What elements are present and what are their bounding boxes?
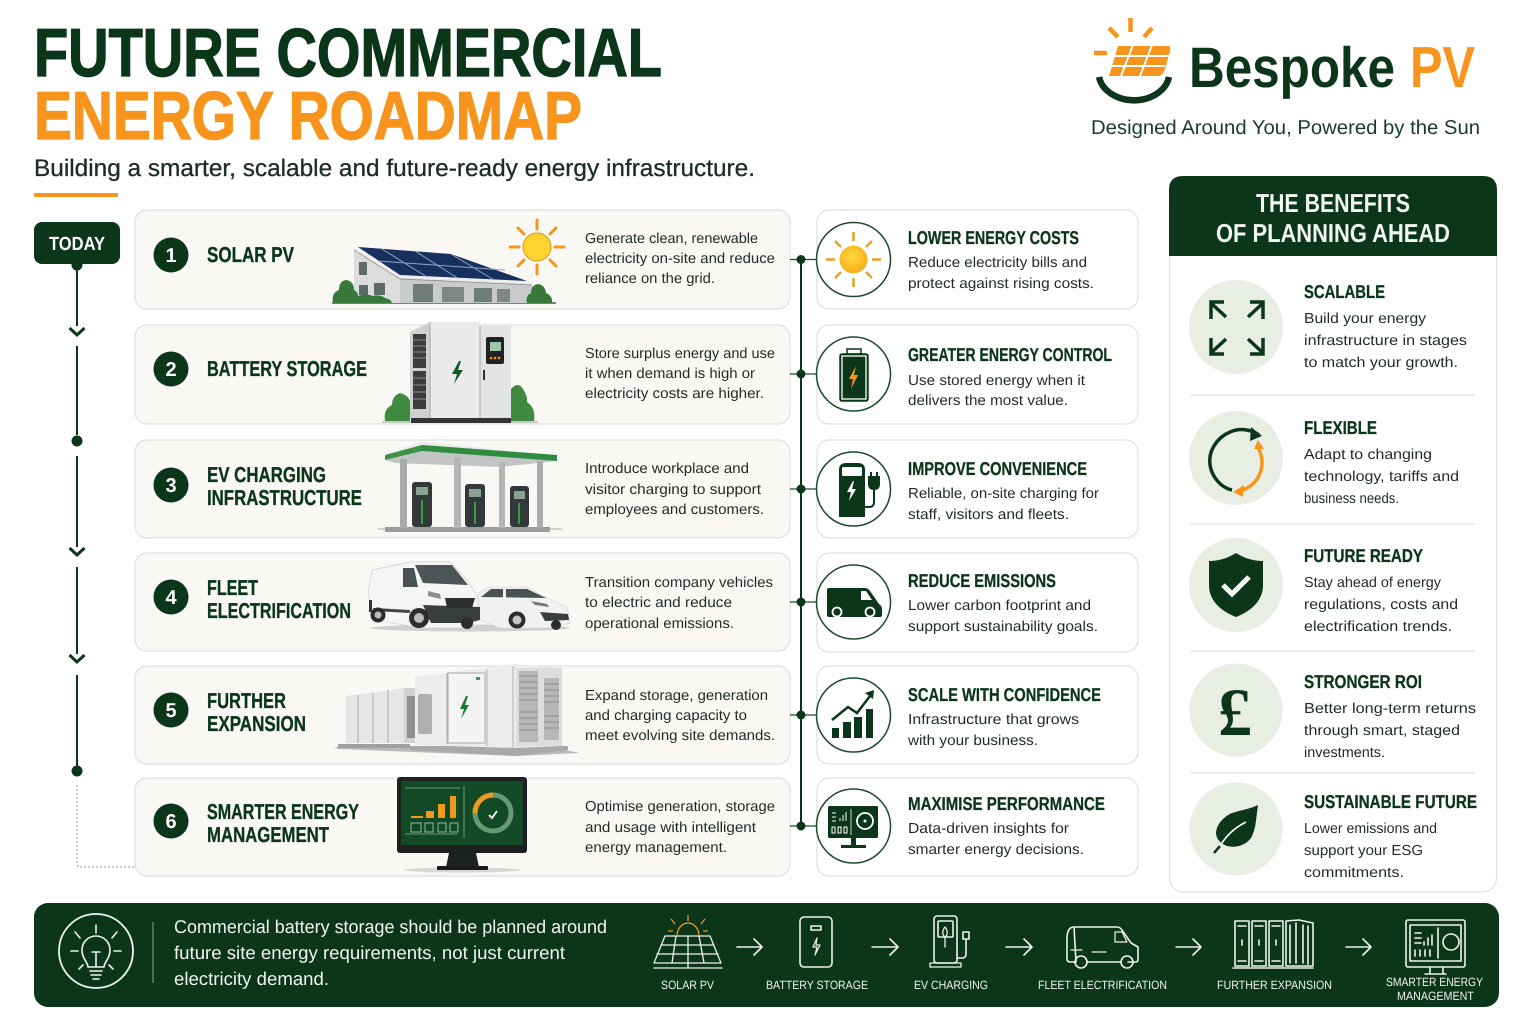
step 5 description: and charging capacity to [585, 708, 747, 724]
panel: step 4 fleet electrification: ELECTRIFICATION [207, 599, 351, 623]
panel: step 6 smarter energy management: SMARTER ENERGY [207, 800, 359, 824]
panel: maximise performance: Data-driven insights for [908, 821, 1069, 837]
pathway: solar pv: SOLAR PV [661, 978, 714, 992]
panel: reduce emissions: support sustainability goals. [908, 619, 1098, 635]
benefit: future ready: electrification trends. [1304, 619, 1452, 635]
icon: battery [816, 337, 890, 411]
step 4 description: operational emissions. [585, 616, 734, 632]
illustration: battery cabinet [382, 322, 538, 423]
panel: step 4 fleet electrification [135, 553, 790, 651]
panel: scale with confidence: SCALE WITH CONFIDENCE [908, 684, 1101, 705]
pathway: solar pv [654, 915, 722, 992]
panel: scale with confidence [816, 666, 1138, 764]
pathway: ev charging: EV CHARGING [914, 978, 988, 992]
benefit: stronger roi [1190, 664, 1476, 761]
title: FUTURE COMMERCIAL [34, 15, 662, 91]
panel: scale with confidence: Infrastructure that grows [908, 712, 1079, 728]
panel: step 6 smarter energy management [135, 777, 790, 876]
illustration: monitor dashboard [397, 777, 527, 872]
panel: step 2 battery storage: 2 [165, 359, 177, 381]
icon: ev charger [816, 452, 890, 526]
step 6 description: energy management. [585, 840, 727, 856]
panel: greater energy control: delivers the most value. [908, 393, 1068, 409]
benefit: flexible: business needs. [1304, 491, 1399, 507]
step 1 description: reliance on the grid. [585, 271, 715, 287]
benefit: sustainable future: SUSTAINABLE FUTURE [1304, 791, 1477, 812]
pathway: ev charging [914, 916, 988, 992]
arrow [872, 939, 898, 955]
subtitle: Building a smarter, scalable and future-ready energy infrastructure. [34, 155, 755, 182]
connector bus between steps and outcomes [790, 255, 817, 830]
panel: step 3 ev charging [135, 440, 790, 538]
panel: step 3 ev charging: 3 [165, 475, 177, 497]
benefit: stronger roi: Better long-term returns [1304, 701, 1476, 717]
benefit: stronger roi: STRONGER ROI [1304, 671, 1422, 692]
pathway: further expansion [1217, 920, 1332, 992]
panel: step 4 fleet electrification: FLEET [207, 576, 258, 600]
logo tagline: Designed Around You, Powered by the Sun [1091, 117, 1480, 139]
pathway: fleet electrification [1038, 927, 1167, 992]
logo: Bespoke PV: PV [1410, 35, 1475, 100]
panel: greater energy control: Use stored energy when it [908, 373, 1085, 389]
icon: expand arrows [1189, 280, 1283, 374]
arrow [1006, 939, 1032, 955]
panel: reduce emissions: Lower carbon footprint and [908, 598, 1091, 614]
pathway: smarter energy management: SMARTER ENERGY [1386, 975, 1483, 989]
callout text: future site energy requirements, not just current [174, 942, 565, 963]
benefit: flexible: FLEXIBLE [1304, 417, 1377, 438]
panel: improve convenience: staff, visitors and fleets. [908, 507, 1069, 523]
step 6 description: Optimise generation, storage [585, 799, 775, 815]
panel: lower energy costs: protect against rising costs. [908, 276, 1094, 292]
benefits header [1169, 176, 1497, 256]
benefit: future ready: Stay ahead of energy [1304, 575, 1442, 591]
callout text: electricity demand. [174, 968, 329, 989]
panel: step 4 fleet electrification: 4 [165, 587, 177, 609]
step 3 description: Introduce workplace and [585, 461, 749, 477]
benefit: flexible: Adapt to changing [1304, 447, 1432, 463]
panel: step 6 smarter energy management: 6 [165, 811, 177, 833]
step 6 description [585, 799, 775, 856]
step 5 description: Expand storage, generation [585, 688, 768, 704]
panel: lower energy costs [816, 210, 1138, 309]
panel: greater energy control: GREATER ENERGY CONTROL [908, 344, 1112, 365]
icon: sun [816, 222, 890, 296]
benefit: flexible: technology, tariffs and [1304, 469, 1459, 485]
arrow [1346, 939, 1371, 955]
icon: logo sun and panel [1094, 18, 1170, 100]
icon: growth chart [816, 678, 890, 752]
pathway: smarter energy management [1386, 920, 1483, 1003]
panel: maximise performance: smarter energy decisions. [908, 842, 1084, 858]
icon: monitor [816, 789, 890, 863]
title [34, 15, 662, 154]
benefit: scalable: infrastructure in stages [1304, 333, 1467, 349]
step 3 description: employees and customers. [585, 502, 764, 518]
van [368, 562, 480, 628]
benefits header: THE BENEFITS [1256, 188, 1410, 218]
benefit: sustainable future: support your ESG [1304, 843, 1423, 859]
panel: greater energy control [816, 325, 1138, 424]
benefit: scalable: Build your energy [1304, 311, 1427, 327]
panel: lower energy costs: Reduce electricity bills and [908, 255, 1087, 271]
panel: the benefits of planning ahead [1169, 176, 1497, 892]
panel: step 5 further expansion [135, 664, 790, 764]
icon: pound sign: £ [1218, 674, 1252, 750]
callout text [174, 916, 607, 989]
icon: pound sign [1190, 664, 1282, 756]
panel: step 6 smarter energy management: MANAGEMENT [207, 823, 329, 847]
panel: reduce emissions: REDUCE EMISSIONS [908, 570, 1056, 591]
step 4 description: to electric and reduce [585, 595, 732, 611]
step 2 description: Store surplus energy and use [585, 346, 775, 362]
callout text: Commercial battery storage should be planned around [174, 916, 607, 937]
panel: step 2 battery storage: BATTERY STORAGE [207, 357, 367, 381]
illustration: containerised storage [334, 664, 580, 756]
panel: step 1 solar pv: SOLAR PV [207, 243, 295, 267]
icon: light bulb [59, 914, 133, 988]
pathway: further expansion: FURTHER EXPANSION [1217, 978, 1332, 992]
panel: scale with confidence: with your business. [907, 733, 1038, 749]
logo wordmark: Bespoke [1189, 36, 1395, 100]
benefit: flexible [1189, 411, 1459, 507]
bottom banner [34, 903, 1499, 1007]
step 5 description: meet evolving site demands. [585, 728, 775, 744]
benefit: future ready: FUTURE READY [1304, 545, 1424, 566]
title: ENERGY ROADMAP [34, 78, 582, 154]
benefit: sustainable future: Lower emissions and [1304, 821, 1437, 837]
panel: step 5 further expansion: 5 [165, 700, 177, 722]
step 4 description: Transition company vehicles [585, 575, 773, 591]
benefit: future ready: regulations, costs and [1304, 597, 1458, 613]
pathway: battery storage [766, 917, 868, 992]
panel: step 3 ev charging: INFRASTRUCTURE [207, 486, 362, 510]
orange accent rule [34, 193, 118, 197]
panel: maximise performance [816, 778, 1138, 876]
arrow [1176, 939, 1201, 955]
icon: sun [510, 220, 564, 274]
panel: step 2 battery storage [135, 322, 790, 424]
panel: lower energy costs: LOWER ENERGY COSTS [908, 227, 1079, 248]
benefit: sustainable future: commitments. [1304, 865, 1404, 881]
panel: maximise performance: MAXIMISE PERFORMANCE [908, 793, 1105, 814]
step 3 description [585, 461, 764, 518]
panel: step 5 further expansion: FURTHER [207, 689, 286, 713]
today badge [34, 222, 120, 270]
logo: Bespoke PV [1091, 18, 1480, 139]
step 4 description [585, 575, 773, 632]
illustration: house with solar roof [332, 247, 556, 303]
step 1 description: electricity on-site and reduce [585, 251, 775, 267]
step 3 description: visitor charging to support [585, 482, 761, 498]
panel: improve convenience: Reliable, on-site charging for [908, 486, 1099, 502]
step 2 description: electricity costs are higher. [585, 386, 764, 402]
icon: cycle arrows [1189, 411, 1283, 505]
benefit: scalable: SCALABLE [1304, 281, 1385, 302]
panel: improve convenience: IMPROVE CONVENIENCE [908, 458, 1087, 479]
benefit: future ready [1189, 538, 1458, 635]
step 5 description [585, 688, 775, 744]
icon: leaf [1190, 782, 1282, 876]
car [478, 587, 570, 628]
arrow [737, 939, 762, 955]
step 1 description: Generate clean, renewable [585, 231, 758, 247]
step 2 description: it when demand is high or [585, 366, 755, 382]
pathway: smarter energy management: MANAGEMENT [1397, 989, 1475, 1003]
illustration: charging canopy [378, 442, 562, 532]
benefit: sustainable future [1190, 782, 1477, 881]
icon: van [816, 565, 890, 639]
panel: improve convenience [816, 440, 1138, 538]
step 6 description: and usage with intelligent [585, 820, 756, 836]
panel: reduce emissions [816, 553, 1138, 652]
benefits header: OF PLANNING AHEAD [1216, 218, 1450, 248]
pathway: battery storage: BATTERY STORAGE [766, 978, 868, 992]
step 1 description [585, 231, 775, 287]
benefit: scalable [1189, 280, 1467, 374]
panel: step 1 solar pv [135, 210, 790, 309]
benefit: stronger roi: investments. [1304, 745, 1385, 761]
icon: shield [1189, 538, 1283, 632]
panel: step 1 solar pv: 1 [165, 245, 177, 267]
illustration: van and car [368, 562, 570, 632]
panel: step 3 ev charging: EV CHARGING [207, 463, 326, 487]
today badge: TODAY [49, 234, 105, 255]
benefit: stronger roi: through smart, staged [1304, 723, 1460, 739]
timeline [34, 222, 135, 867]
pathway: fleet electrification: FLEET ELECTRIFICATION [1038, 978, 1167, 992]
step 2 description [585, 346, 775, 402]
benefit: scalable: to match your growth. [1304, 355, 1458, 371]
panel: step 5 further expansion: EXPANSION [207, 712, 306, 736]
